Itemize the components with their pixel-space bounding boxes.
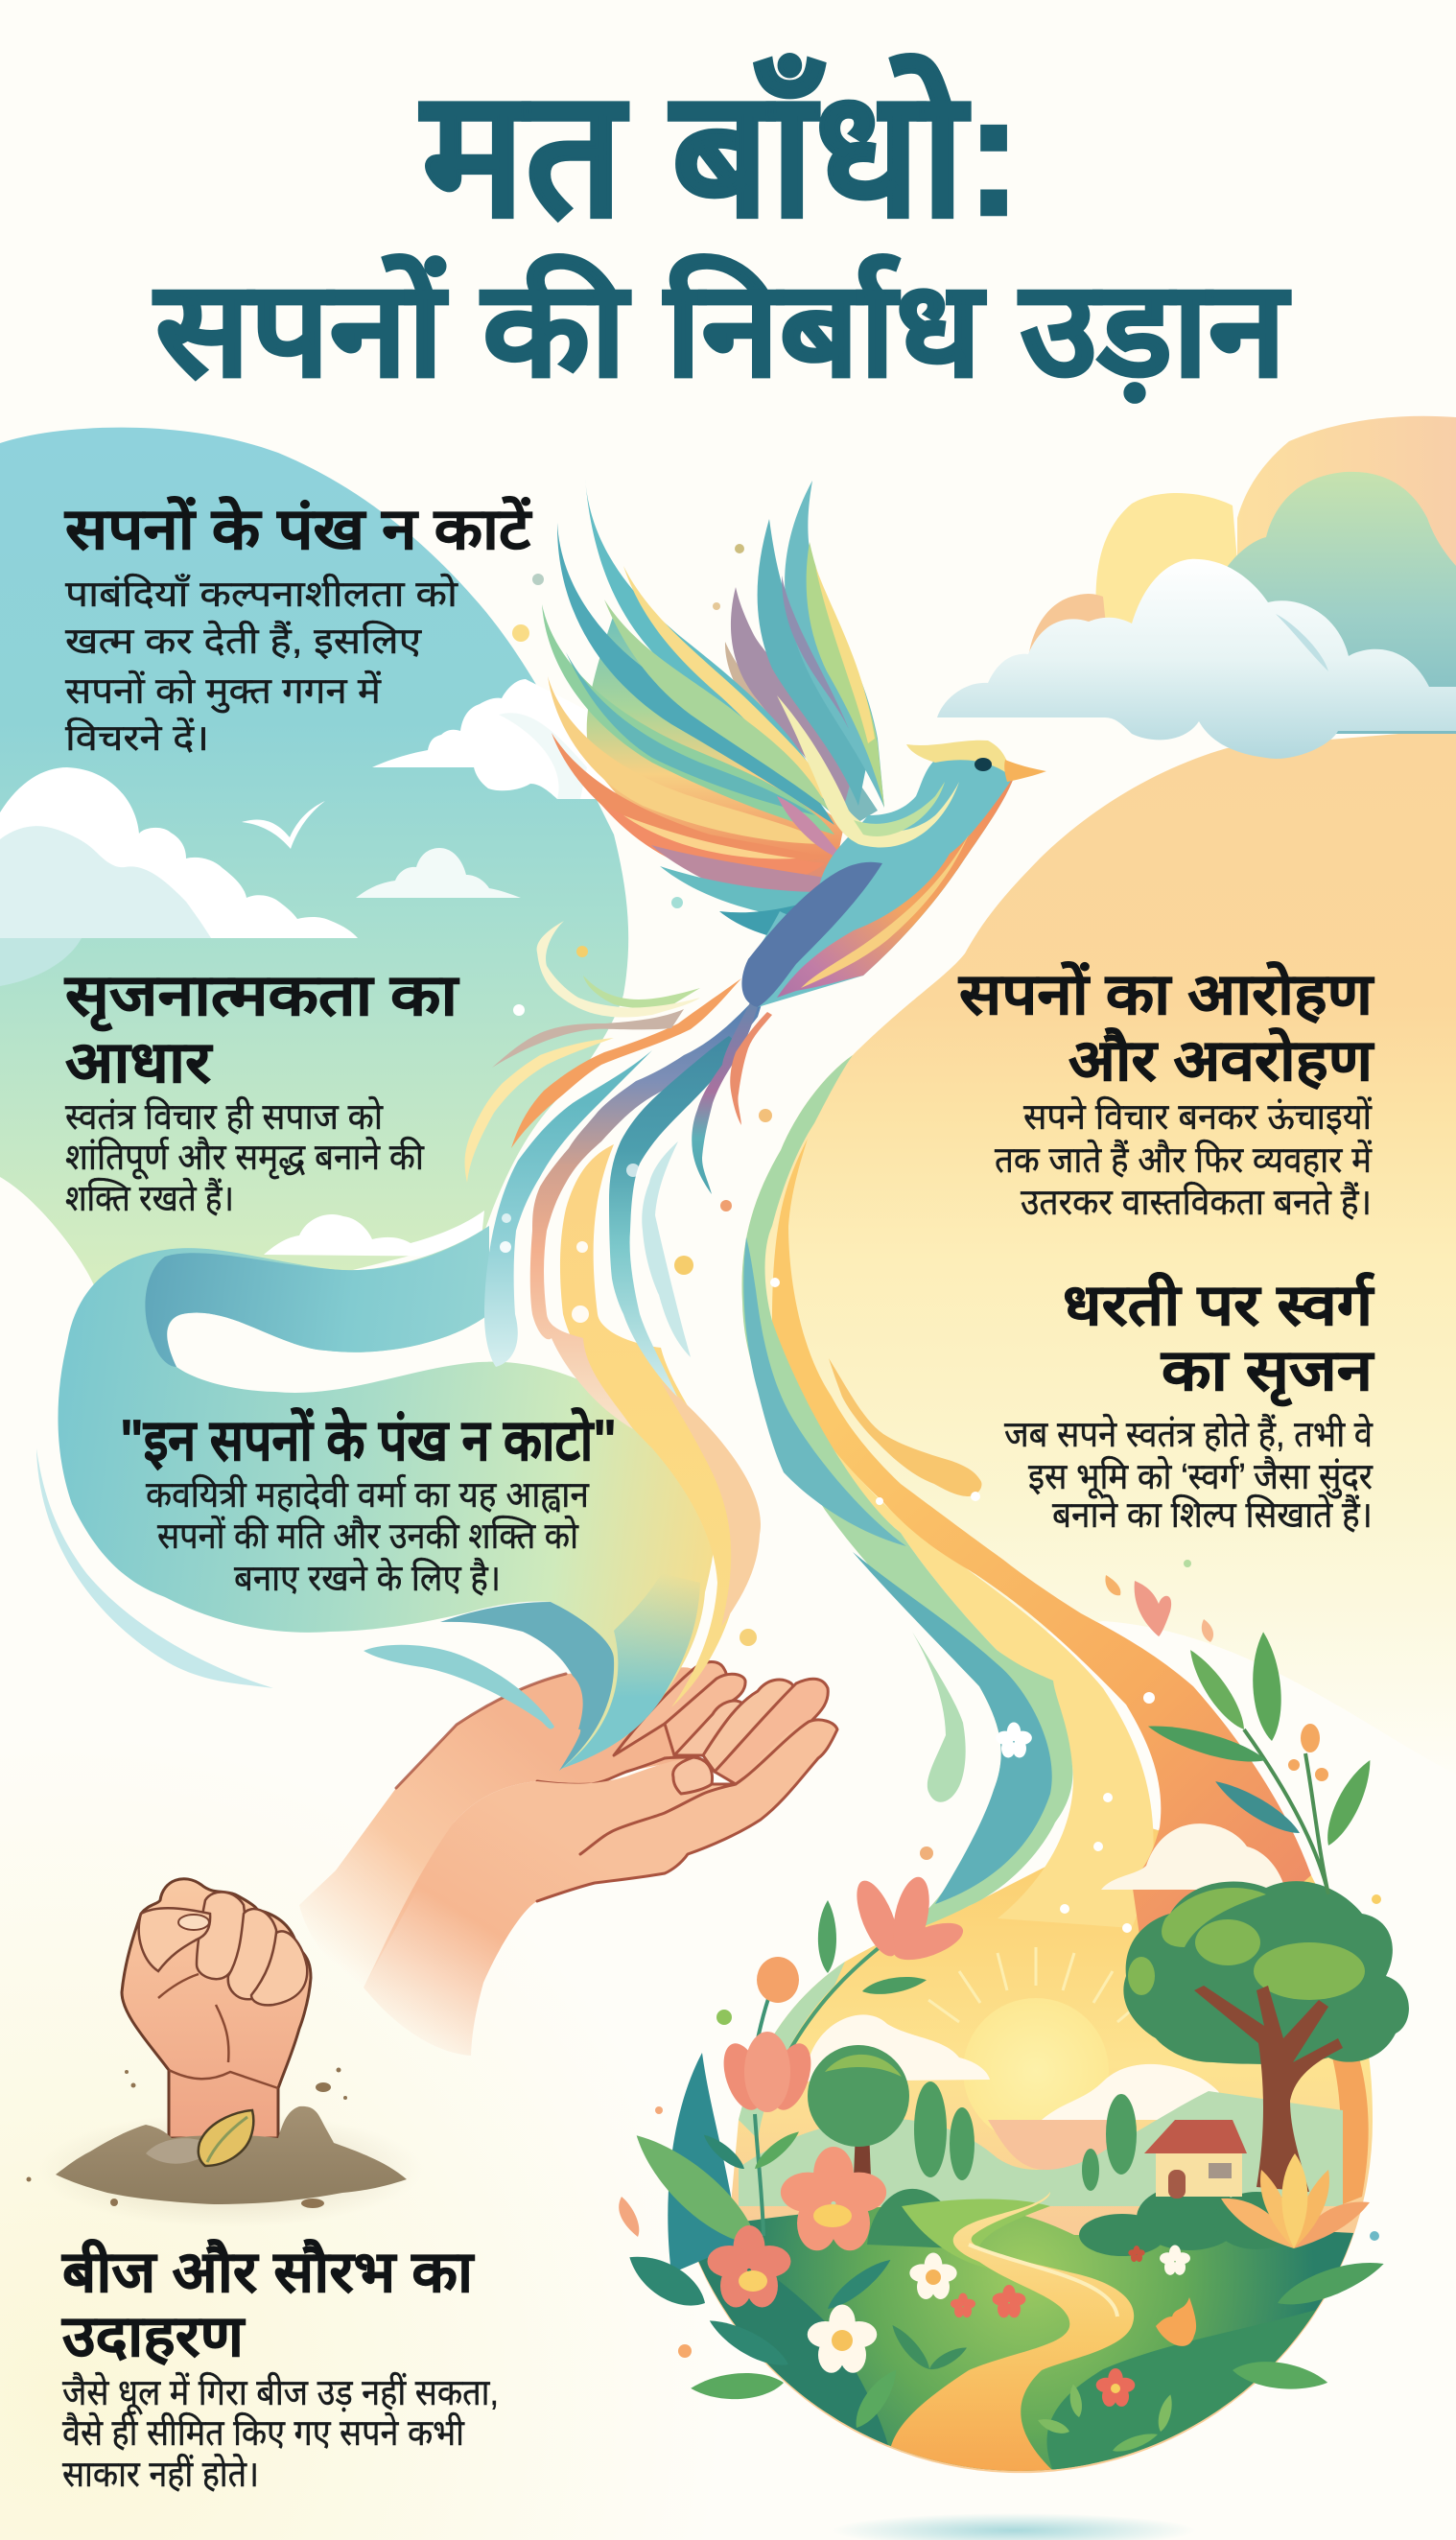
heading: और अवरोहण [1069, 1027, 1375, 1093]
right edge orange [1328, 2024, 1369, 2206]
leaves lower center [887, 2321, 934, 2374]
green streak [583, 976, 700, 1008]
heading: बीज और सौरभ का [61, 2239, 476, 2304]
finger [674, 1701, 743, 1755]
bird eye [975, 758, 992, 771]
yellow strand [560, 1144, 742, 1707]
peach mauve strand [530, 985, 767, 1429]
yellow cloud [1095, 493, 1247, 671]
icon: back hand [299, 1661, 745, 1987]
sun [963, 1998, 1109, 2144]
heading [61, 2239, 476, 2368]
sky arc band [739, 1962, 845, 2139]
heading [64, 963, 460, 1094]
palm top outline [665, 1757, 693, 1758]
seed ridge [207, 2117, 247, 2162]
seed [199, 2110, 253, 2166]
body [995, 1095, 1373, 1223]
right dark bushes [1079, 2192, 1281, 2256]
crown [1123, 1881, 1409, 2064]
peach puff [1027, 594, 1113, 691]
small left tree [808, 2045, 909, 2177]
peach cloud [1237, 416, 1456, 671]
pebbles [27, 2068, 347, 2208]
text block: धरती पर स्वर्ग का सृजन [1004, 1272, 1375, 1536]
petal heart [1135, 1581, 1171, 1636]
flower: tulip left [716, 2032, 818, 2115]
cream yellow strand [465, 1038, 614, 1183]
orange stream band [772, 1139, 1311, 2014]
distant hills [739, 2091, 1343, 2206]
back arm outline [396, 1674, 566, 1788]
quote heading: "इन सपनों के पंख न काटो" [120, 1407, 617, 1472]
bird belly stripe [801, 835, 969, 988]
quote body [146, 1473, 590, 1599]
wing mass underlay [587, 614, 844, 921]
thumb [673, 1757, 713, 1794]
panel: ribbon quote banner [36, 1226, 715, 1771]
body: साकार नहीं होते। [62, 2453, 259, 2495]
cloud: bottom of blob [264, 1211, 484, 1257]
ribbon pale underside [36, 1448, 273, 1688]
cloud: right of text [372, 679, 623, 799]
petal [1105, 1575, 1120, 1595]
heading: उदाहरण [61, 2304, 247, 2368]
teal stream band upper [743, 1237, 906, 1546]
top right branch [1244, 1729, 1328, 1894]
cloud: top right of sky [1101, 1823, 1285, 1890]
ribbon tip front [561, 1573, 700, 1769]
bird blue underwing [741, 862, 882, 1007]
cloud fold [1276, 614, 1328, 671]
body: शक्ति रखते हैं। [65, 1177, 234, 1219]
body [65, 1095, 425, 1219]
heading: का सृजन [1161, 1338, 1375, 1407]
yellow stream band [772, 1321, 1154, 1928]
icon: front hand [364, 1679, 837, 2056]
icon: fist and seed [27, 1879, 422, 2227]
teal outer strand [484, 1050, 652, 1367]
leaves left [622, 2122, 770, 2261]
flower: white [808, 2304, 877, 2373]
quote body: बनाए रखने के लिए है। [234, 1557, 501, 1599]
cream crescent [537, 921, 700, 1017]
road [889, 2192, 1134, 2471]
flower: small white [909, 2252, 957, 2299]
blue strand [609, 1036, 740, 1397]
panel: right warm blob [741, 729, 1456, 1775]
body: सपने विचार बनकर ऊंचाइयों [1023, 1095, 1373, 1138]
body: शांतिपूर्ण और समृद्ध बनाने की [65, 1136, 425, 1180]
heading: सृजनात्मकता का [64, 963, 460, 1032]
body: इस भूमि को ‘स्वर्ग’ जैसा सुंदर [1028, 1455, 1374, 1499]
back arm [299, 1667, 710, 1987]
text block: सृजनात्मकता का आधार [64, 963, 460, 1219]
orange strand [511, 978, 741, 1148]
palm and arm [364, 1720, 837, 2056]
petal [1202, 1619, 1213, 1642]
tan wisp [492, 1009, 684, 1068]
teal stream band lower [853, 1552, 1052, 1904]
bird chest [777, 775, 1015, 998]
road highlight [969, 2245, 1117, 2317]
fingers [703, 1680, 793, 1772]
heading: सपनों का आरोहण [958, 961, 1375, 1026]
panel: tail strands [465, 921, 772, 1707]
neck highlight [777, 695, 959, 848]
ribbon wisp [364, 1645, 554, 1729]
cloud: left of sun [806, 2014, 990, 2081]
mauve teal strand [692, 1002, 758, 1194]
body: तक जाते हैं और फिर व्यवहार में [995, 1139, 1373, 1181]
left wing feathers [585, 478, 834, 815]
sun rays [928, 1947, 1143, 2022]
body: बनाने का शिल्प सिखाते हैं। [1052, 1493, 1373, 1536]
panel: landscape globe [621, 1631, 1409, 2475]
panel: stream flowing to the landscape [683, 1055, 1373, 2473]
cloud group: top right [937, 416, 1456, 759]
body: जब सपने स्वतंत्र होते हैं, तभी वे [1004, 1413, 1374, 1455]
green stream band [741, 1055, 1072, 1938]
title line 2: सपनों की निर्बाध उड़ान [153, 254, 1291, 404]
heading: आधार [65, 1030, 214, 1094]
finger [614, 1661, 726, 1755]
body: पाबंदियाँ कल्पनाशीलता को [65, 573, 458, 615]
quote body: कवयित्री महादेवी वर्मा का यह आह्वान [146, 1473, 590, 1516]
crest [906, 741, 1012, 777]
flower: upper lily [848, 1873, 968, 1967]
pale blue strand [642, 1141, 691, 1357]
title line 1: मत बाँधो: [419, 54, 1022, 252]
bird beak [1004, 760, 1046, 782]
body: स्वतंत्र विचार ही सपाज को [65, 1095, 384, 1138]
heading [1063, 1272, 1375, 1407]
wings [542, 478, 884, 945]
large tree [1123, 1881, 1409, 2192]
trunk [1194, 1986, 1343, 2192]
heading: सपनों के पंख न काटें [64, 496, 533, 561]
cloud: small [356, 848, 521, 898]
crease [580, 1784, 736, 1854]
text block: बीज और सौरभ का उदाहरण [61, 2239, 499, 2495]
callout: quote in ribbon [120, 1407, 617, 1599]
body: सपनों को मुक्त गगन में [65, 670, 382, 714]
fist hand [122, 1879, 311, 2138]
flower: big peach [781, 2147, 886, 2250]
ground shadow [832, 2513, 1196, 2540]
body: जैसे धूल में गिरा बीज उड़ नहीं सकता, [62, 2371, 499, 2415]
blob lower left pale [0, 938, 82, 986]
palm creases [158, 1974, 278, 2088]
flower: small tulip orange [1156, 2297, 1196, 2346]
soil lump [146, 2138, 216, 2164]
droplet: orange [829, 1358, 982, 1496]
body: खत्म कर देती हैं, इसलिए [65, 620, 422, 662]
upper vine [788, 1943, 884, 2053]
body: विचरने दें। [65, 717, 209, 759]
cloud: large left [0, 767, 358, 938]
flower: coral [708, 2225, 790, 2308]
orange buds [1288, 1724, 1328, 1781]
icon: small white bird [242, 801, 325, 849]
cloud: right of sun [1042, 2064, 1237, 2120]
body [1004, 1413, 1374, 1536]
text block: सपनों के पंख न काटें [64, 496, 533, 759]
flower: bud [757, 1957, 799, 2003]
grass ground [698, 2189, 1354, 2471]
mid hill [902, 2199, 1050, 2269]
body: वैसे ही सीमित किए गए सपने कभी [62, 2411, 465, 2454]
sparkles [500, 544, 772, 1646]
droplet: green [912, 1632, 966, 1802]
icon: phoenix bird [542, 478, 1046, 1007]
peach horizon [988, 2120, 1132, 2170]
orange right strand [730, 1012, 772, 1125]
ribbon tip dark fold [440, 1602, 614, 1771]
heading: धरती पर स्वर्ग [1063, 1272, 1374, 1337]
finger shapes [139, 1892, 307, 2005]
leaves right [1273, 2251, 1388, 2315]
white cloud [937, 559, 1456, 759]
cypress trees [914, 2081, 1137, 2191]
foliage and flowers [621, 1631, 1388, 2456]
crown highlights [1128, 1888, 1365, 2000]
heading [958, 961, 1375, 1093]
left dark foliage [698, 2262, 888, 2446]
finger [665, 1674, 745, 1755]
text block: सपनों का आरोहण और अवरोहण [958, 961, 1375, 1223]
cloud: soft shade on left cloud [0, 826, 211, 938]
left teal crescent [668, 2053, 739, 2273]
right lower dark [1047, 2310, 1316, 2469]
right wing underlay [772, 633, 878, 825]
globe sky [683, 1823, 1373, 2473]
thumb nail [178, 1915, 209, 1930]
body [65, 573, 458, 759]
stream spots and drifting petals [619, 1278, 1381, 2358]
green teal cloud [1218, 472, 1456, 734]
right wing feathers [725, 642, 782, 729]
ribbon inner dark fold [145, 1226, 489, 1367]
soil mound [56, 2106, 407, 2204]
thumb [139, 1908, 210, 1971]
bird body [748, 749, 1015, 1007]
hand lower outline [537, 1720, 837, 1901]
neck green [854, 782, 945, 836]
house [1144, 2120, 1247, 2199]
body: उतरकर वास्तविकता बनते हैं। [1021, 1181, 1372, 1223]
tulip stem [755, 1990, 771, 2236]
dust [38, 2112, 422, 2227]
left leaf sprig [619, 2197, 639, 2237]
flower: small red [993, 2285, 1025, 2317]
left dark bush [867, 2189, 942, 2248]
cloud: right shading [499, 713, 587, 799]
back palm line [537, 1758, 665, 1784]
peach flame [661, 1381, 761, 1627]
title [153, 54, 1291, 404]
quote body: सपनों की मति और उनकी शक्ति को [157, 1515, 579, 1557]
body [62, 2371, 499, 2495]
flower: lotus right [1221, 2153, 1370, 2248]
panel: left sky blob [0, 428, 628, 1285]
